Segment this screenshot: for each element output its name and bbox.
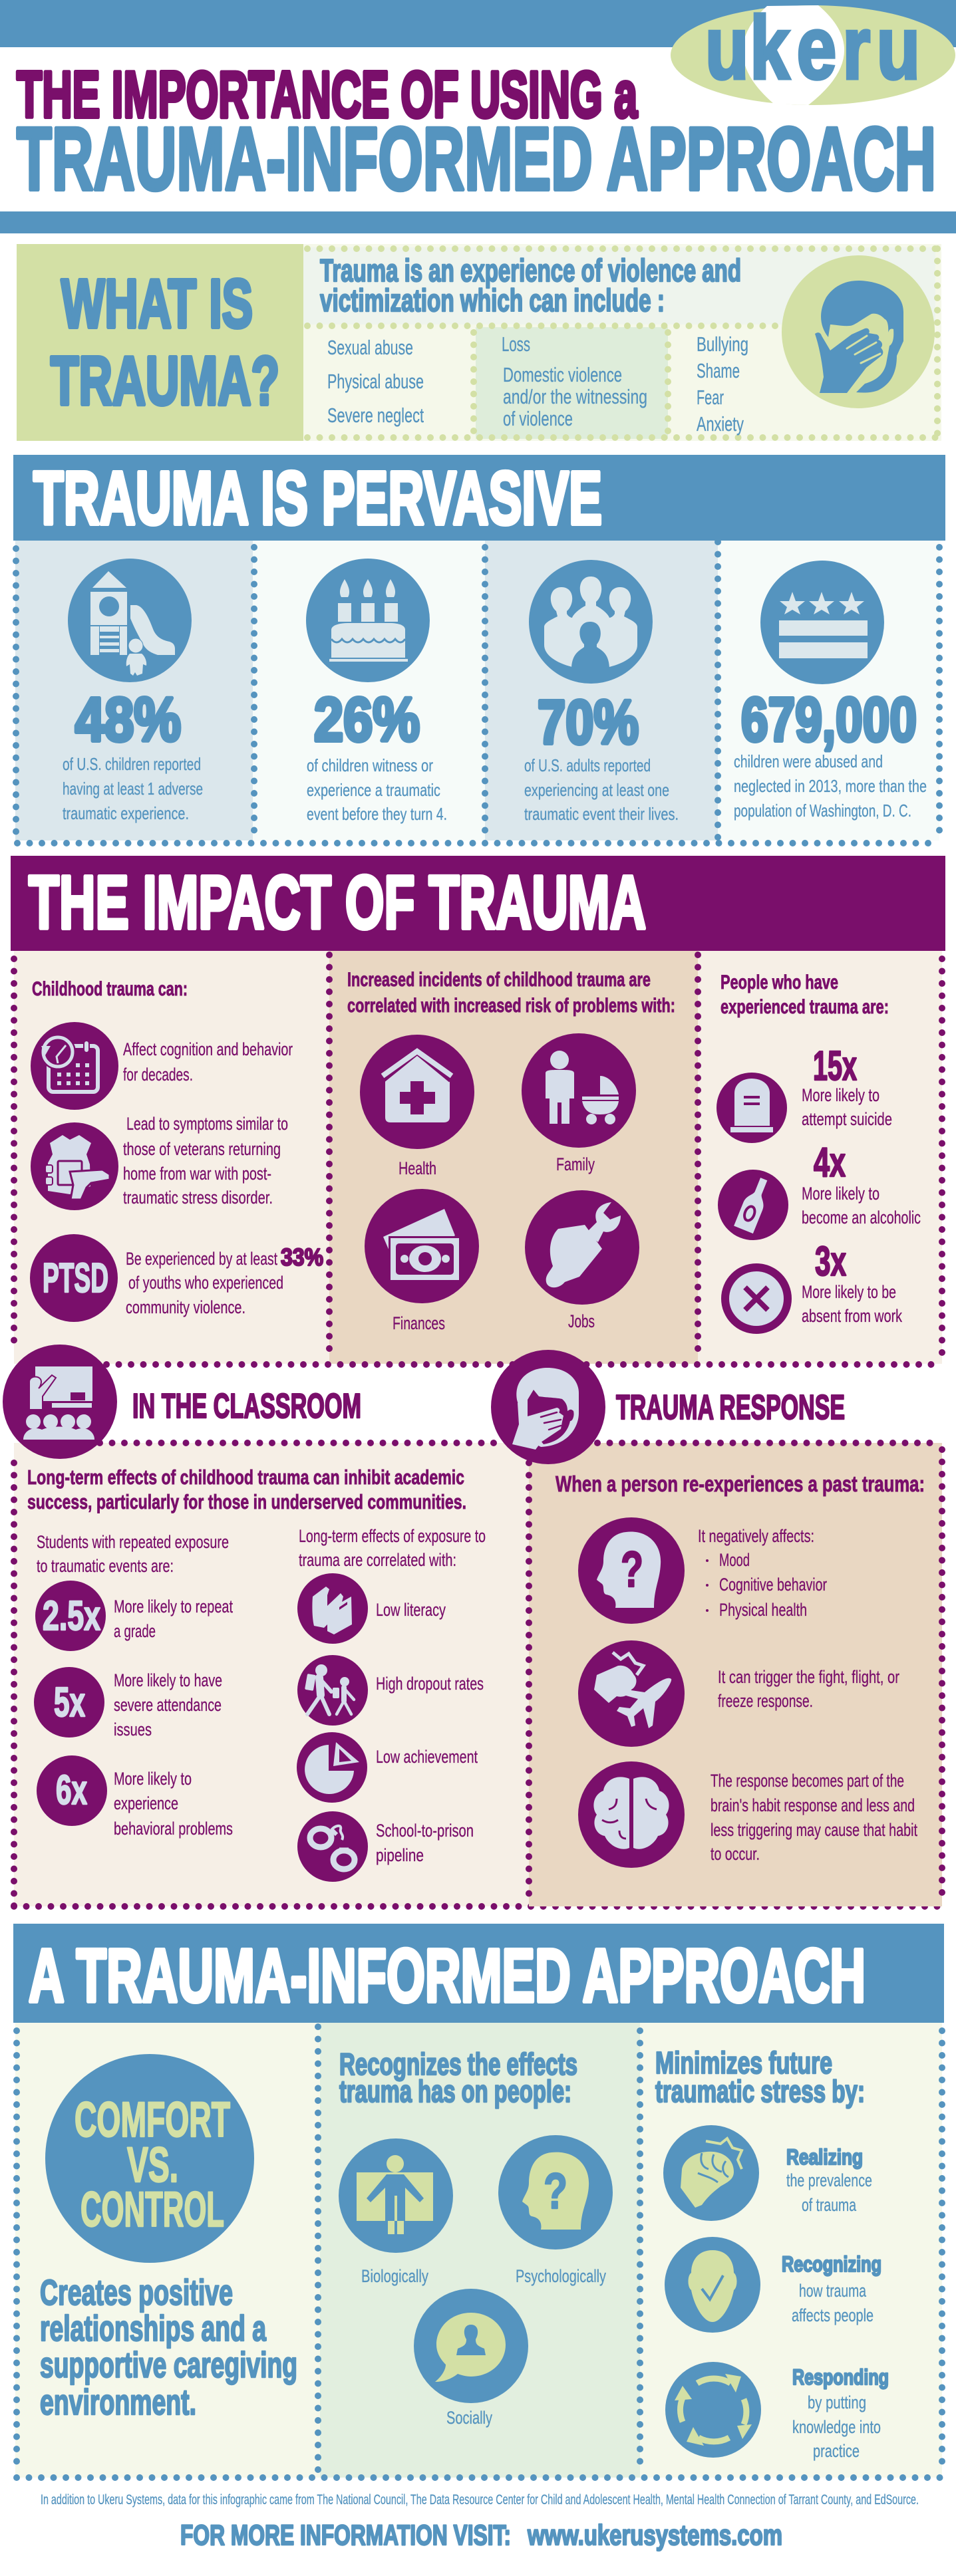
description: of children witness or — [307, 755, 433, 775]
section banner: the impact of trauma: THE IMPACT OF TRAUMA — [29, 860, 646, 944]
divider dots under impact panel — [106, 1361, 942, 1368]
big number: 48% — [75, 685, 181, 754]
list: abuse types: Severe neglect — [327, 404, 424, 427]
call to action: FOR MORE INFORMATION VISIT: — [180, 2519, 511, 2551]
column heading: trauma has on people: — [339, 2074, 571, 2109]
label: Psychologically — [516, 2266, 606, 2286]
description: having at least 1 adverse — [63, 779, 203, 799]
stat: 5x — [34, 1667, 222, 1739]
subheading: long-term effects: Long-term effects of exposure to — [299, 1526, 486, 1546]
statement — [40, 2273, 297, 2422]
intro text: success, particularly for those in underserved communities. — [27, 1490, 466, 1513]
description: children were abused and — [734, 751, 883, 771]
stat: 3x: 3x — [815, 1239, 846, 1285]
item: responding: knowledge into — [792, 2417, 881, 2437]
list: loss and violence: Domestic violence — [503, 363, 622, 386]
icon: bottle — [707, 1159, 799, 1251]
column heading: Increased incidents of childhood trauma are — [347, 969, 651, 991]
column: comfort vs control — [40, 2054, 297, 2422]
item: low achievement: Low achievement — [376, 1747, 478, 1767]
item: responding — [665, 2362, 889, 2461]
panel: impact of trauma — [14, 951, 942, 1364]
description: traumatic event their lives. — [524, 804, 679, 824]
text — [123, 1039, 293, 1085]
stat: 15x — [802, 1043, 892, 1129]
item: realizing: of trauma — [802, 2195, 857, 2215]
big number: 26% — [314, 685, 420, 754]
stat: 679,000 — [734, 561, 927, 821]
icon: family silhouette — [529, 560, 653, 684]
item: realizing: the prevalence — [786, 2170, 872, 2190]
column: minimizes future stress — [655, 2045, 889, 2461]
text: for decades. — [123, 1065, 193, 1085]
subheading: long-term effects: trauma are correlated with: — [299, 1550, 456, 1570]
item: low achievement — [297, 1732, 478, 1803]
item: high dropout rates: High dropout rates — [376, 1674, 484, 1694]
label: Finances — [393, 1313, 445, 1333]
icon: covered face — [782, 255, 935, 408]
text: Lead to symptoms similar to — [126, 1114, 288, 1134]
column: recognizes the effects — [339, 2047, 613, 2428]
description: experiencing at least one — [524, 780, 669, 800]
badge — [45, 2054, 254, 2263]
heading: IN THE CLASSROOM — [132, 1387, 361, 1426]
item: negative effects — [578, 1517, 827, 1624]
item: negative effects: Mood — [719, 1550, 750, 1570]
item: brain habit — [578, 1761, 917, 1868]
icon: absent x — [721, 1263, 792, 1334]
definition text: victimization which can include : — [320, 283, 665, 318]
item: brain habit: to occur. — [711, 1844, 760, 1864]
stat: 5x: More likely to have — [114, 1670, 222, 1690]
text: 33% — [281, 1243, 323, 1271]
call to action: www.ukerusystems.com — [527, 2519, 782, 2551]
white strip behind subsection headings — [0, 1368, 956, 1440]
item: school to prison: pipeline — [376, 1845, 424, 1865]
stat: 3x: More likely to be — [802, 1282, 896, 1302]
icon: gravestone — [717, 1073, 787, 1143]
icon: vest and gun — [31, 1122, 118, 1210]
icon: biologically — [339, 2138, 453, 2253]
header — [0, 0, 956, 233]
panel: pervasive statistics — [15, 541, 939, 843]
column heading — [339, 2047, 577, 2109]
item: recognizing — [665, 2237, 881, 2333]
column heading — [655, 2045, 865, 2109]
intro text — [27, 1466, 466, 1513]
list: bullying and feelings — [697, 332, 748, 436]
item: fight or flight: It can trigger the fight, flight, or — [718, 1667, 899, 1687]
stat: 3x: absent from work — [802, 1306, 902, 1326]
list: bullying and feelings: Anxiety — [697, 412, 744, 436]
icon: finances — [365, 1189, 479, 1303]
icon: family — [522, 1033, 636, 1148]
stat: 48% — [63, 559, 203, 823]
section banner: trauma is pervasive: TRAUMA IS PERVASIVE — [33, 456, 602, 540]
panel: in the classroom — [3, 1345, 942, 1906]
column: correlated problems — [347, 969, 675, 1333]
text: community violence. — [126, 1297, 245, 1317]
badge: CONTROL — [80, 2182, 224, 2237]
list: loss and violence — [502, 332, 647, 430]
icon: health — [360, 1035, 474, 1149]
icon: birthday cake — [306, 559, 430, 682]
definition text: Trauma is an experience of violence and — [320, 253, 741, 288]
item: responding: Responding — [792, 2365, 889, 2389]
item: recognizing: Recognizing — [782, 2252, 881, 2276]
icon: washington dc flag — [760, 561, 884, 684]
description: traumatic experience. — [63, 803, 189, 823]
logo: ukeru: ukeru — [705, 0, 920, 98]
stat: 4x: 4x — [814, 1140, 846, 1186]
list: abuse types: Sexual abuse — [327, 336, 413, 359]
text — [126, 1243, 323, 1317]
item: realizing: Realizing — [786, 2145, 863, 2169]
item: low literacy — [297, 1573, 446, 1644]
item: school to prison: School-to-prison — [376, 1821, 474, 1841]
subheading: students — [37, 1532, 229, 1576]
stat: 5x: severe attendance — [114, 1695, 222, 1715]
heading: what is trauma: WHAT IS — [61, 265, 253, 342]
column heading: traumatic stress by: — [655, 2074, 865, 2109]
column: childhood trauma can — [30, 978, 323, 1322]
panel: trauma-informed approach — [15, 2023, 942, 2551]
list: loss and violence: of violence — [503, 407, 573, 430]
text: those of veterans returning — [123, 1139, 281, 1159]
icon: calendar clock — [31, 1022, 118, 1110]
list: bullying and feelings: Shame — [697, 359, 740, 382]
stat: 2.5x — [35, 1581, 233, 1651]
label: Jobs — [568, 1311, 595, 1331]
stat: 4x: More likely to — [802, 1184, 879, 1204]
column heading: People who have — [720, 971, 838, 993]
column heading: Minimizes future — [655, 2045, 832, 2080]
column heading — [347, 969, 675, 1017]
stat: 6x: behavioral problems — [114, 1819, 233, 1839]
description: event before they turn 4. — [307, 804, 447, 824]
stat: 6x: 6x — [56, 1767, 87, 1813]
panel: trauma response — [491, 1350, 942, 1906]
subheading: students: to traumatic events are: — [37, 1556, 174, 1576]
column heading — [720, 971, 889, 1018]
text: of youths who experienced — [128, 1273, 283, 1293]
statement: relationships and a — [40, 2309, 267, 2349]
icon: psychologically: ? — [544, 2163, 567, 2220]
text — [123, 1114, 288, 1208]
stat: 5x: issues — [114, 1720, 152, 1739]
list: abuse types: Physical abuse — [327, 370, 424, 393]
stat: 6x: experience — [114, 1793, 178, 1813]
item: low literacy: Low literacy — [376, 1600, 446, 1620]
description: of U.S. adults reported — [524, 755, 651, 775]
column heading: Childhood trauma can: — [32, 978, 188, 1000]
heading: what is trauma: TRAUMA? — [51, 342, 279, 419]
badge: COMFORT — [75, 2092, 230, 2147]
list: loss and violence: and/or the witnessing — [503, 385, 647, 408]
description — [307, 755, 447, 824]
label: Family — [556, 1154, 595, 1174]
stat: 6x — [37, 1755, 233, 1839]
stat: 26% — [306, 559, 447, 824]
statement: Creates positive — [40, 2273, 233, 2313]
list: abuse types — [327, 336, 424, 427]
item: recognizing: how trauma — [799, 2281, 867, 2301]
icon: ptsd: PTSD — [43, 1255, 108, 1301]
list: bullying and feelings: Bullying — [697, 332, 748, 356]
item: fight or flight: freeze response. — [718, 1691, 813, 1711]
badge: VS. — [127, 2137, 178, 2192]
stat: 15x: 15x — [813, 1043, 857, 1089]
statement: supportive caregiving — [40, 2345, 297, 2385]
item: school to prison — [297, 1811, 474, 1882]
description: experience a traumatic — [307, 780, 440, 800]
list: bullying and feelings: Fear — [697, 386, 724, 409]
column heading: Recognizes the effects — [339, 2047, 577, 2081]
item: fight or flight — [578, 1640, 899, 1747]
text: Be experienced by at least — [126, 1249, 277, 1269]
item: negative effects: Cognitive behavior — [719, 1575, 827, 1595]
item: responding: practice — [813, 2441, 860, 2461]
item: recognizing: affects people — [792, 2305, 874, 2325]
text: traumatic stress disorder. — [123, 1188, 273, 1208]
item: responding: by putting — [808, 2392, 866, 2412]
subheading: students: Students with repeated exposure — [37, 1532, 229, 1552]
stat: 5x: 5x — [54, 1680, 85, 1726]
intro text: Long-term effects of childhood trauma can inhibit academic — [27, 1466, 464, 1489]
definition text — [320, 253, 741, 318]
icon: psychologically — [498, 2135, 613, 2250]
panel: what is trauma — [17, 244, 941, 441]
column: more likely — [707, 971, 921, 1334]
icon: jobs — [525, 1190, 639, 1305]
label: Health — [398, 1158, 436, 1178]
subheading: long-term effects — [299, 1526, 486, 1570]
description — [524, 755, 679, 824]
heading: TRAUMA RESPONSE — [616, 1388, 845, 1427]
stat: 4x — [802, 1140, 921, 1227]
icon: ptsd — [30, 1234, 118, 1322]
icon: teacher — [3, 1345, 117, 1459]
icon: playground — [68, 559, 192, 682]
stat: 70% — [524, 560, 679, 824]
list: loss and violence: Loss — [502, 332, 530, 356]
item: realizing — [663, 2125, 872, 2221]
icon: covered face — [491, 1350, 605, 1464]
column heading: experienced trauma are: — [720, 996, 889, 1018]
description: of U.S. children reported — [63, 754, 201, 774]
label: Socially — [446, 2408, 492, 2428]
text: Affect cognition and behavior — [123, 1039, 293, 1059]
stat: 2.5x: 2.5x — [43, 1593, 100, 1639]
stat: 15x: More likely to — [802, 1085, 879, 1105]
column heading: correlated with increased risk of problems with: — [347, 995, 675, 1017]
label: Biologically — [361, 2266, 428, 2286]
stat: 15x: attempt suicide — [802, 1109, 892, 1129]
stat: 2.5x: More likely to repeat — [114, 1597, 233, 1616]
heading: what is trauma — [51, 265, 279, 419]
big number: 70% — [538, 688, 639, 757]
text: home from war with post- — [123, 1164, 271, 1184]
stat: 2.5x: a grade — [114, 1621, 156, 1641]
stat: 3x — [802, 1239, 902, 1326]
item: high dropout rates — [297, 1655, 484, 1726]
stat: 6x: More likely to — [114, 1769, 192, 1789]
item: negative effects: ? — [621, 1541, 643, 1598]
icon: socially — [414, 2289, 528, 2403]
item: negative effects: It negatively affects: — [698, 1526, 814, 1546]
description — [63, 754, 203, 823]
item: negative effects: Physical health — [719, 1600, 807, 1620]
statement: environment. — [40, 2383, 196, 2422]
description — [734, 751, 927, 821]
